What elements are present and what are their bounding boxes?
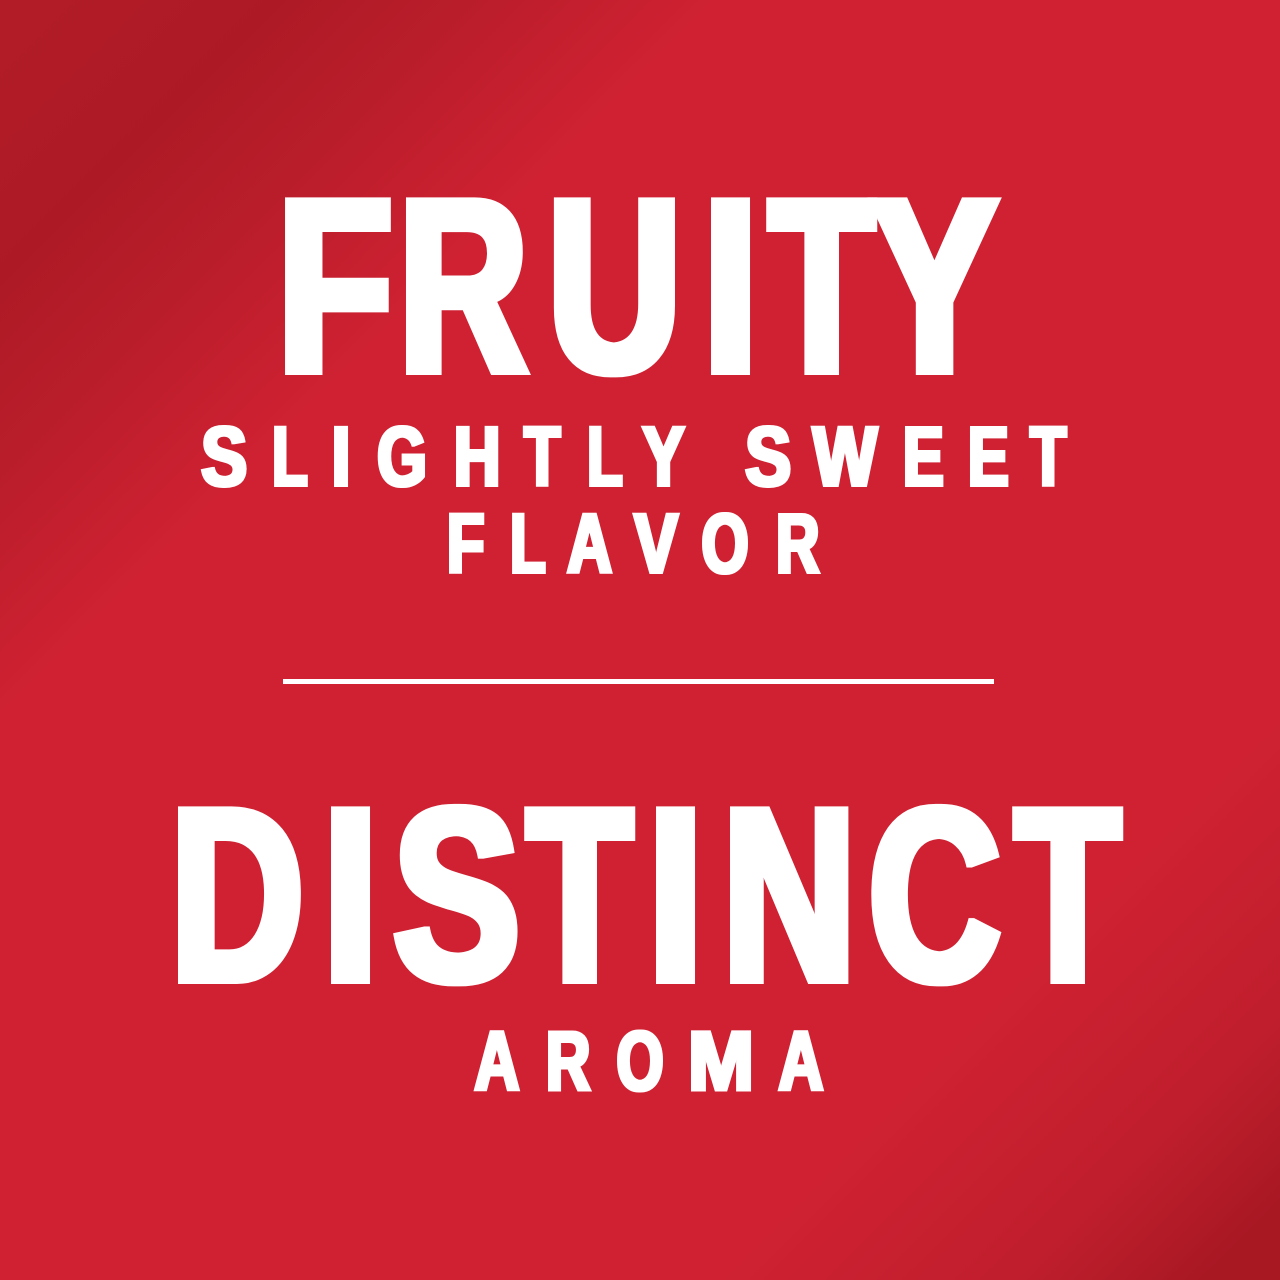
text: SLIGHTLY SWEET: S [201,411,247,504]
text: AROMA: O [617,1015,663,1108]
heading: FRUITY: I [703,148,758,425]
heading: DISTINCT [171,756,1120,1034]
heading: FRUITY [278,147,998,425]
text: AROMA: R [546,1014,590,1108]
text: SLIGHTLY SWEET: I [332,410,350,504]
text: FLAVOR [447,496,819,591]
heading: DISTINCT: I [323,757,378,1034]
text: SLIGHTLY SWEET [201,409,1066,504]
text: SLIGHTLY SWEET: H [454,409,500,503]
text: SLIGHTLY SWEET: E [968,410,1009,504]
heading: FRUITY: Y [871,147,998,424]
text: SLIGHTLY SWEET: W [813,411,878,504]
text: SLIGHTLY SWEET: G [377,410,427,504]
text: FLAVOR: F [447,496,484,591]
heading: FRUITY: T [769,148,874,425]
text: AROMA [474,1014,823,1109]
text: SLIGHTLY SWEET: T [1030,410,1066,504]
text: AROMA: A [474,1014,519,1108]
text: AROMA: M [688,1015,754,1109]
text: FLAVOR: A [567,496,612,591]
text: AROMA: A [778,1014,823,1108]
text: SLIGHTLY SWEET: L [587,411,622,504]
text: FLAVOR: L [510,498,545,591]
text: SLIGHTLY SWEET: E [903,410,944,504]
divider [283,679,994,684]
heading: FRUITY: R [399,147,528,424]
text: SLIGHTLY SWEET: T [524,410,560,504]
heading: DISTINCT: N [723,757,856,1034]
heading: DISTINCT: C [869,757,1001,1034]
heading: FRUITY: U [548,148,681,425]
text: SLIGHTLY SWEET: S [745,411,791,504]
text: FLAVOR: O [702,498,748,591]
heading: FRUITY: F [278,147,393,424]
text: FLAVOR: V [634,497,678,590]
heading: DISTINCT: I [648,757,703,1034]
text: SLIGHTLY SWEET: L [272,411,307,504]
heading: DISTINCT: S [393,756,520,1033]
heading: DISTINCT: D [171,757,304,1034]
text: FLAVOR: R [776,498,819,591]
text: SLIGHTLY SWEET: Y [642,410,685,504]
heading: DISTINCT: T [1015,757,1120,1034]
heading: DISTINCT: T [527,757,632,1034]
